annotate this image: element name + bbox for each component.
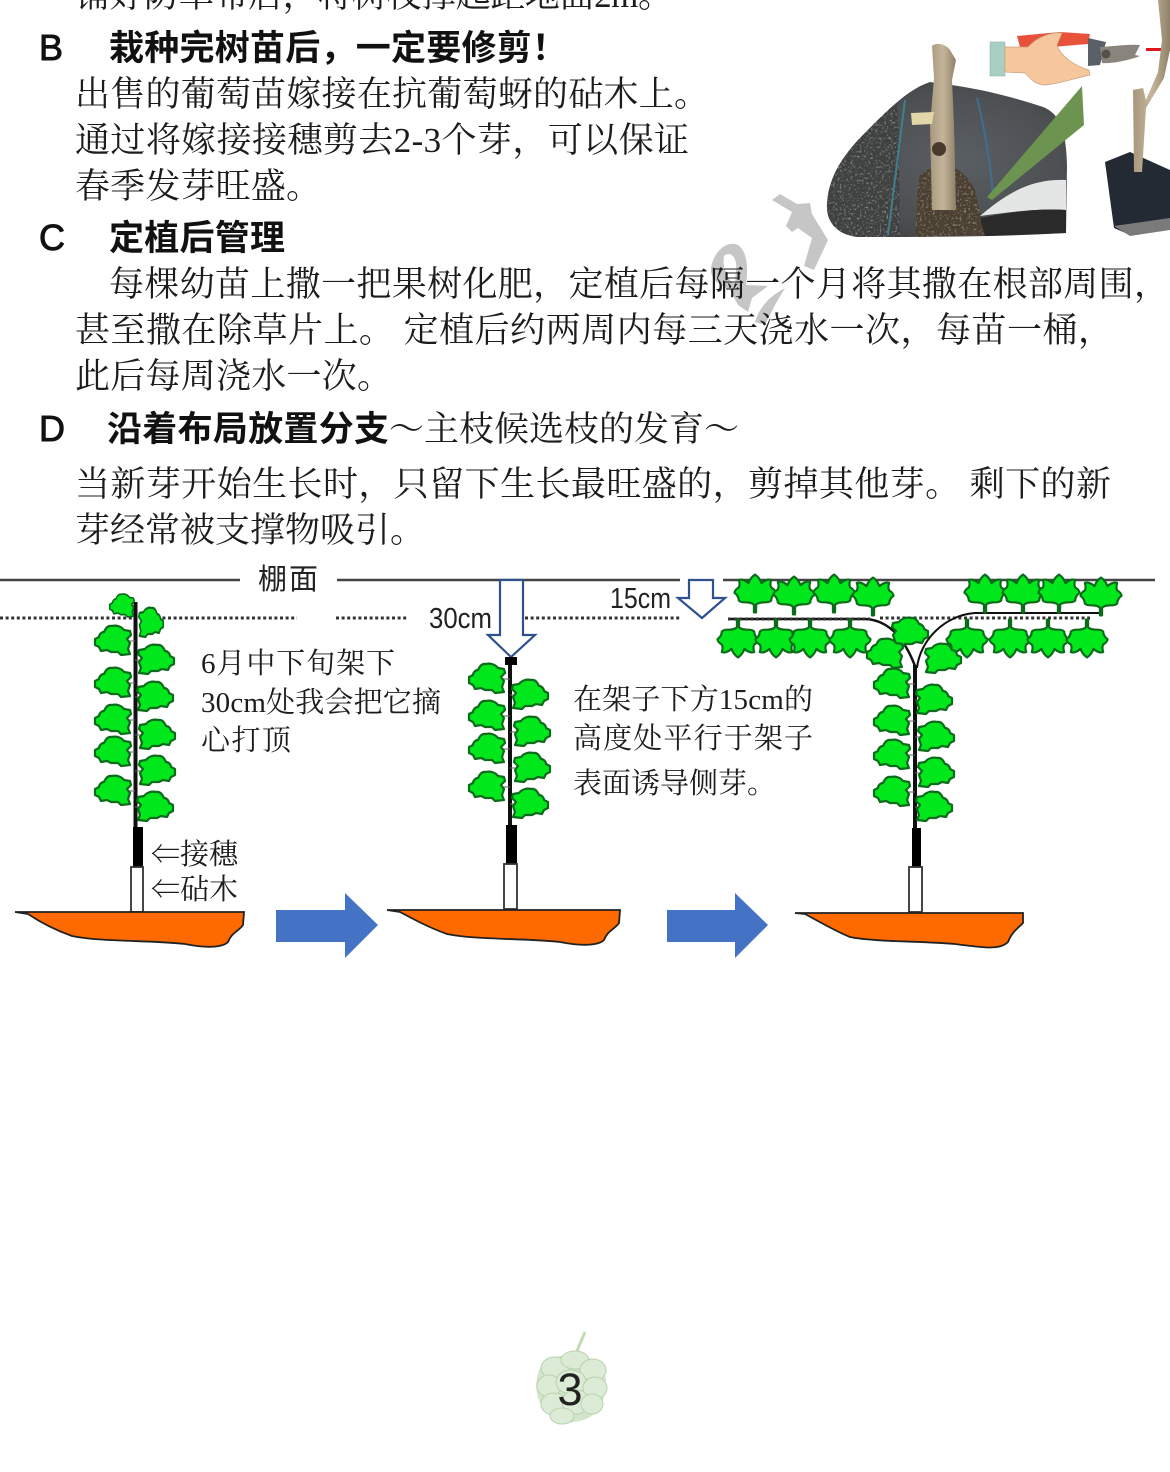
- text block: lateral shoot note: [573, 683, 813, 800]
- soil 3: [795, 913, 1023, 948]
- text block: section C body: 每棵幼苗上撒一把果树化肥，定植后每隔一个月将其撒在根部周围，: [109, 265, 1169, 304]
- text block: lateral shoot note: 表面诱导侧芽。: [573, 767, 776, 800]
- scion block 1: [133, 827, 143, 867]
- heading: section D: 沿着布局放置分支: [107, 410, 389, 449]
- heading: section C: [39, 217, 285, 258]
- photo: second seedling in black pot: [1105, 0, 1170, 236]
- heading: section B: 栽种完树苗后，一定要修剪！: [109, 29, 567, 68]
- heading: section B: B: [39, 27, 63, 68]
- plant 2: seedling after pinching: [387, 657, 620, 945]
- dotted line: 30cm below trellis: [0, 616, 1090, 620]
- trellis surface line and label: 棚面: [258, 563, 318, 596]
- text block: lateral shoot note: 在架子下方15cm的: [573, 683, 813, 716]
- text block: section B body: 出售的葡萄苗嫁接在抗葡萄蚜的砧木上。: [75, 75, 709, 114]
- scion block 3: [912, 828, 921, 867]
- text block: section C body: 甚至撒在除草片上。 定植后约两周内每三天浇水一次，每苗一桶，: [75, 311, 1113, 350]
- text block: section B body: 通过将嫁接接穗剪去2-3个芽，可以保证: [75, 121, 689, 160]
- plant 1: seedling before pinching: [15, 594, 244, 947]
- text block: section C body: [75, 265, 1169, 396]
- soil 2: [387, 910, 620, 945]
- text block: pinching note: 6月中下旬架下: [201, 647, 395, 680]
- text block: lateral shoot note: 高度处平行于架子: [573, 722, 813, 755]
- text block: pinching note: 心打顶: [201, 724, 292, 757]
- photo: pruned seedling on mulch sheet: [827, 44, 1084, 237]
- arrow: step 1 to step 2: [276, 893, 378, 958]
- watermark: grey stamp marks: [711, 194, 828, 325]
- heading: section C: 定植后管理: [109, 219, 285, 258]
- icon: hand holding pruning shears: [990, 32, 1140, 85]
- page number on grape cluster: 3: [557, 1364, 583, 1415]
- heading: section C: C: [39, 217, 65, 258]
- plant 3: trained T-shaped vine: [717, 575, 1122, 948]
- rootstock block 3: [909, 867, 922, 912]
- text block: section B body: 春季发芽旺盛。: [75, 167, 321, 206]
- text block: section D body: [75, 465, 1111, 550]
- label: 15cm: 15cm: [610, 583, 671, 615]
- scion block 2: [506, 825, 517, 864]
- label: scion: ⇐接穗: [151, 838, 239, 871]
- text block: section D body: 芽经常被支撑物吸引。: [75, 511, 425, 550]
- text block: section B body: [75, 75, 709, 206]
- soil 1: [15, 912, 244, 947]
- marker: red line: [1146, 48, 1170, 51]
- label: rootstock: ⇐砧木: [151, 873, 238, 906]
- arrow: step 2 to step 3: [667, 893, 768, 958]
- heading: section D: ～主枝候选枝的发育～: [389, 410, 739, 449]
- arrow: 30cm marker: [488, 580, 535, 657]
- text block: pinching note: [201, 647, 441, 757]
- rootstock block 2: [504, 864, 517, 909]
- page number on grape cluster: [536, 1332, 607, 1424]
- label: 30cm: 30cm: [429, 603, 492, 635]
- text block: section D body: 当新芽开始生长时，只留下生长最旺盛的，剪掉其他芽。 剩下的新: [75, 465, 1111, 504]
- arrow: 15cm marker: [678, 580, 725, 618]
- rootstock block 1: [131, 867, 143, 912]
- heading: section D: D: [39, 408, 65, 449]
- text block: section C body: 此后每周浇水一次。: [75, 357, 392, 396]
- heading: section D: [39, 408, 739, 449]
- text block: pinching note: 30cm处我会把它摘: [201, 686, 441, 719]
